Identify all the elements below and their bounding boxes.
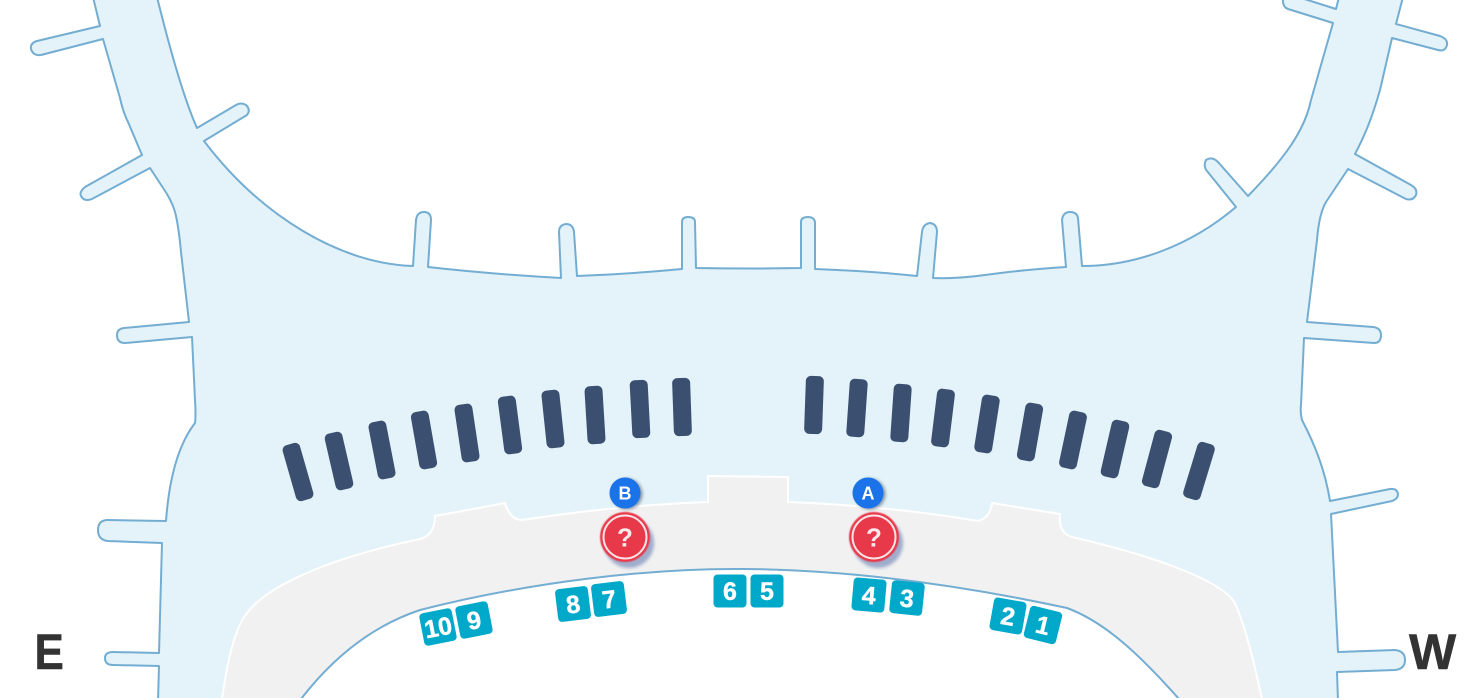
marker B [610,478,642,510]
information icon left: ? [617,522,633,552]
compass label west: W [1409,624,1457,680]
information icon right [849,512,903,568]
door badges: 1 [1033,611,1053,641]
door badges: 4 [861,581,877,611]
check-in counters right group [804,376,1216,501]
compass label east: E [34,623,64,680]
information icon left [600,512,654,568]
door badges: 9 [465,606,484,636]
door badges: 8 [565,590,582,620]
marker A: A [862,484,874,504]
door badges: 6 [723,578,737,606]
inner building void [301,569,1179,698]
door badges: 5 [760,578,774,606]
door badges: 3 [899,584,915,614]
door badges [419,574,1063,646]
door badges: 10 [422,612,455,644]
marker A [852,478,886,510]
door badges: 7 [601,585,618,615]
marker B: B [618,484,632,504]
door badges: 2 [999,602,1017,632]
check-in hall floor [222,476,1262,698]
information icon right: ? [866,522,882,552]
check-in counters left group [281,378,692,502]
